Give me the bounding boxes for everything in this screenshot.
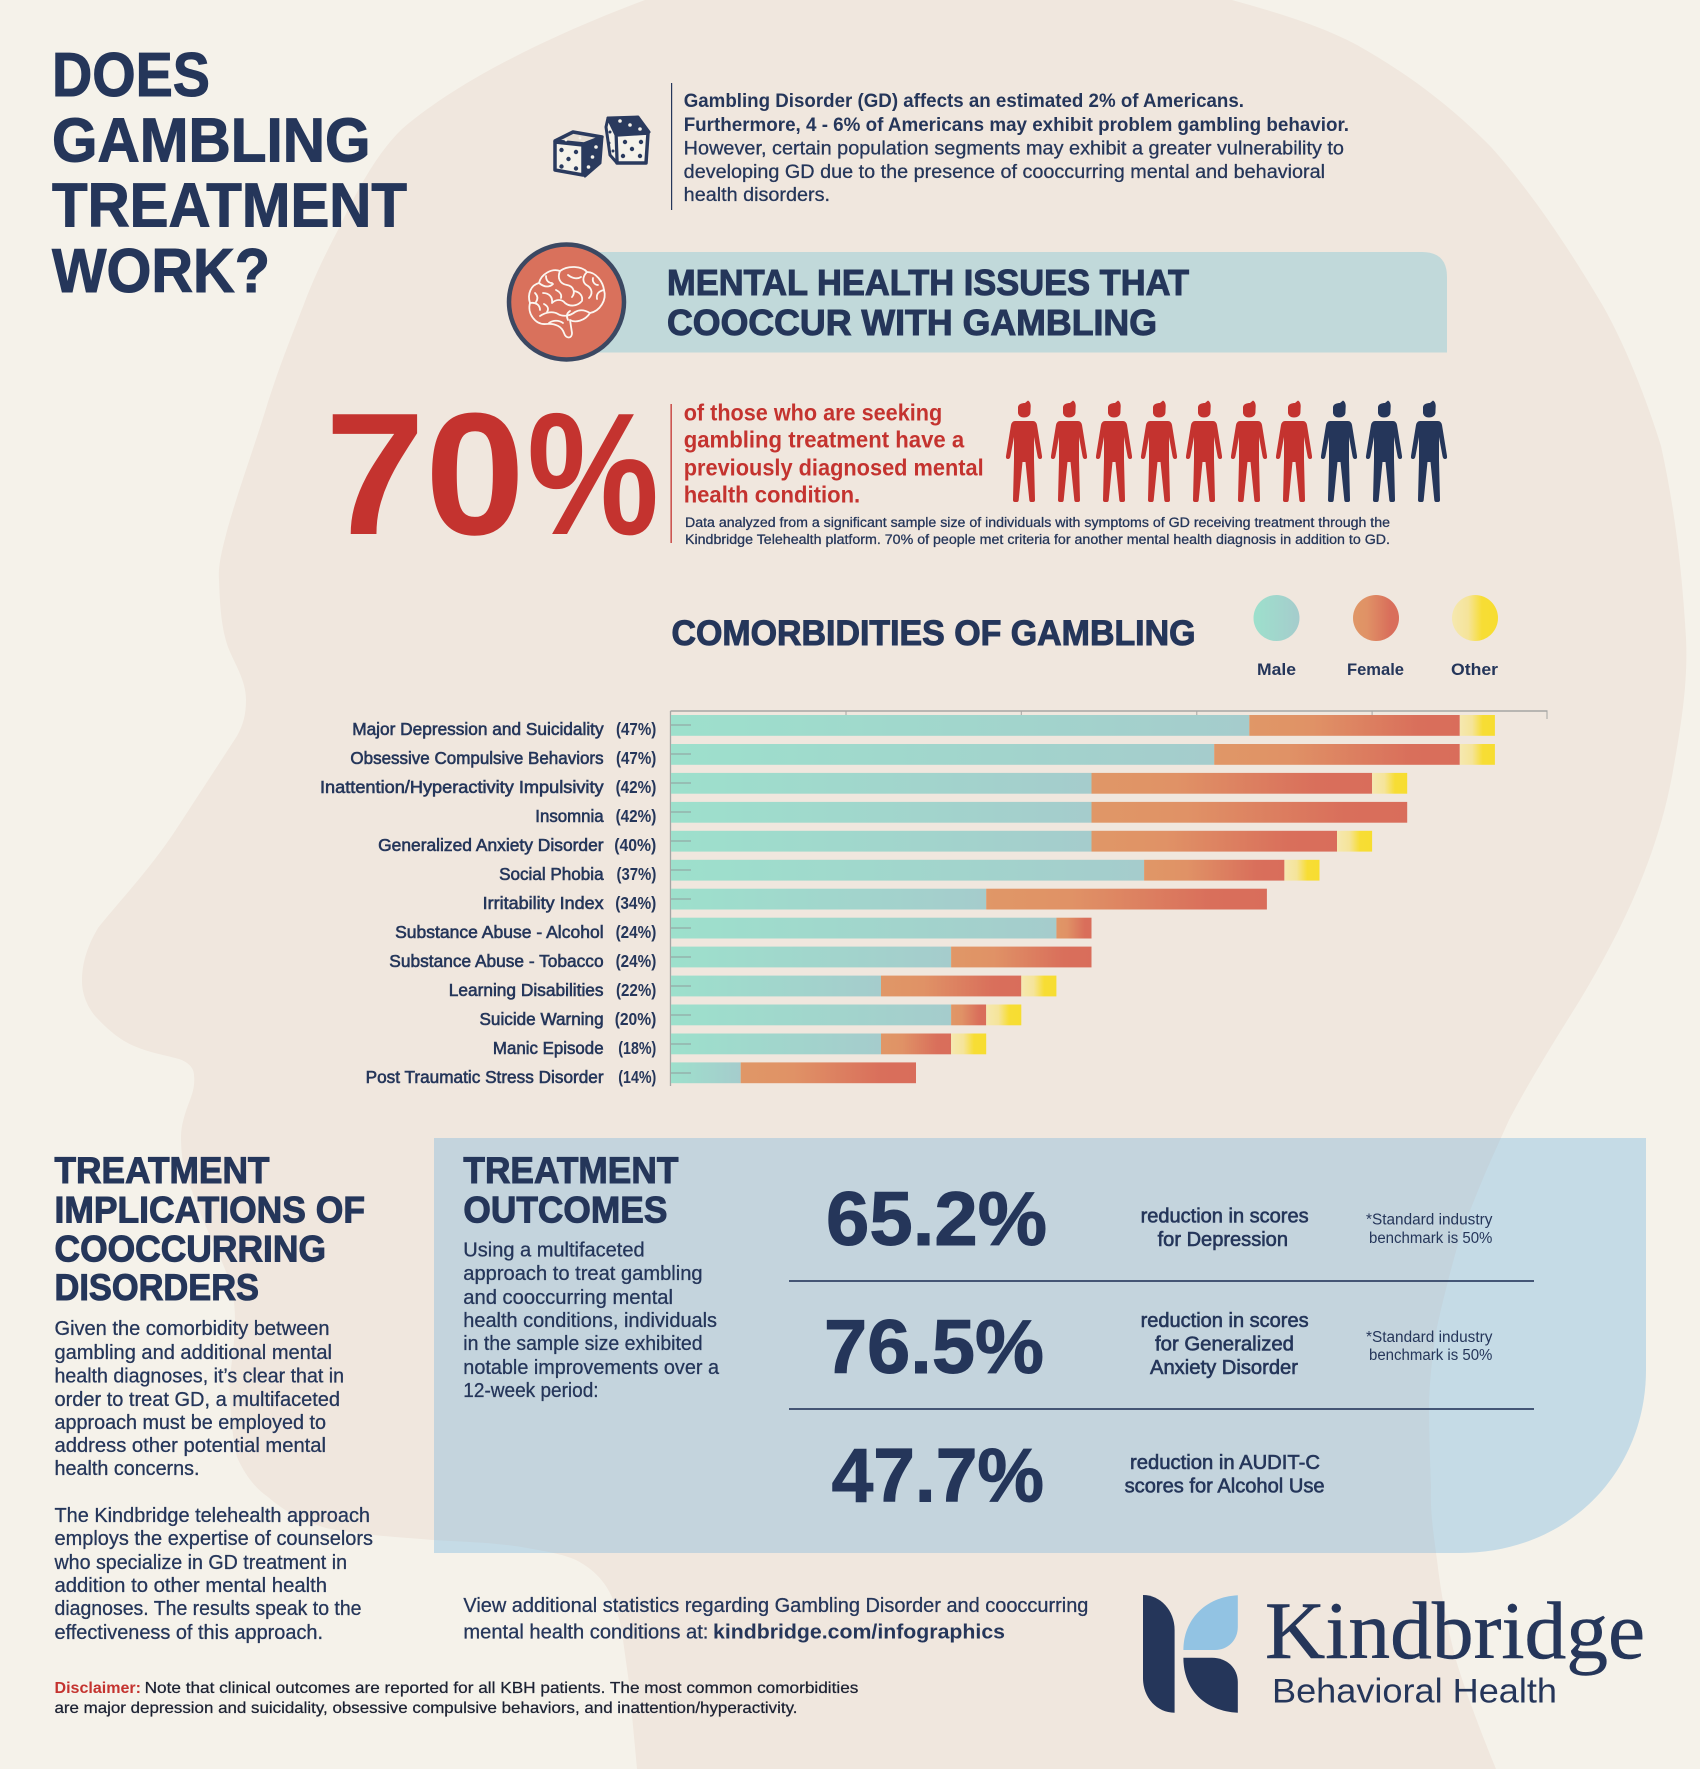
intro text block: Furthermore, 4 - 6% of Americans may exhibit problem gambling behavior.	[684, 114, 1349, 136]
heading: comorbidities: COMORBIDITIES OF GAMBLING	[672, 614, 1196, 653]
intro text block: Gambling Disorder (GD) affects an estimated 2% of Americans.	[684, 90, 1244, 112]
implications body: Given the comorbidity between	[54, 1318, 330, 1340]
stat: alcohol: 47.7%	[832, 1434, 1044, 1519]
row percentages: (47%)	[616, 748, 656, 768]
logo tagline: Behavioral Health	[1272, 1673, 1557, 1711]
intro text block: However, certain population segments may exhibit a greater vulnerability to	[684, 138, 1344, 160]
outcomes body: approach to treat gambling	[463, 1263, 703, 1285]
logo: Kindbridge Behavioral Health	[1143, 1585, 1645, 1713]
row percentages: (14%)	[618, 1067, 656, 1087]
stat: alcohol	[832, 1434, 1325, 1519]
icon: dice	[555, 117, 649, 176]
row percentages: (20%)	[615, 1009, 656, 1029]
outcomes body: 12-week period:	[463, 1380, 599, 1402]
outcomes body: and cooccurring mental	[463, 1287, 673, 1309]
stat: depression: *Standard industry	[1366, 1212, 1493, 1229]
stat: anxiety	[824, 1305, 1493, 1390]
implications heading	[54, 1150, 365, 1308]
row percentages: (18%)	[618, 1038, 656, 1058]
row labels: Generalized Anxiety Disorder	[378, 835, 604, 855]
implications body: effectiveness of this approach.	[54, 1622, 323, 1644]
call to action: kindbridge.com/infographics	[713, 1622, 1005, 1644]
implications heading: IMPLICATIONS OF	[54, 1190, 365, 1230]
disclaimer: Note that clinical outcomes are reported for all KBH patients. The most common comorbidities	[145, 1680, 858, 1697]
outcomes body	[463, 1240, 720, 1402]
row percentages: (22%)	[616, 980, 656, 1000]
outcomes heading: TREATMENT	[463, 1150, 679, 1191]
row labels: Substance Abuse - Tobacco	[389, 951, 604, 971]
red statement: previously diagnosed mental	[684, 455, 984, 481]
row labels: Suicide Warning	[480, 1009, 604, 1029]
people pictogram: 7 of 10	[1006, 400, 1447, 502]
stat: anxiety: reduction in scores	[1141, 1310, 1309, 1332]
banner background	[560, 252, 1447, 352]
divider	[789, 1280, 1534, 1282]
implications body: addition to other mental health	[54, 1575, 327, 1597]
stat: depression	[826, 1177, 1493, 1262]
outcomes body: in the sample size exhibited	[463, 1333, 703, 1355]
row labels	[320, 719, 604, 1087]
implications body: employs the expertise of counselors	[54, 1528, 373, 1550]
call to action: mental health conditions at:	[463, 1622, 708, 1644]
legend: Other	[1451, 660, 1498, 679]
implications body: address other potential mental	[54, 1435, 326, 1457]
implications body: health concerns.	[54, 1458, 200, 1480]
stat: alcohol: scores for Alcohol Use	[1125, 1476, 1325, 1498]
banner heading: MENTAL HEALTH ISSUES THAT	[667, 262, 1189, 303]
row percentages: (24%)	[616, 922, 656, 942]
disclaimer: Disclaimer:	[54, 1680, 141, 1697]
panel: treatment implications	[54, 1150, 373, 1644]
row labels: Manic Episode	[493, 1038, 604, 1058]
footnote: Kindbridge Telehealth platform. 70% of people met criteria for another mental health diagnosis in addition to GD.	[685, 532, 1390, 547]
intro text block	[671, 83, 1349, 210]
row percentages: (47%)	[616, 719, 656, 739]
title: TREATMENT	[52, 172, 407, 240]
implications heading: COOCCURRING	[54, 1228, 326, 1270]
big 70%: %	[527, 376, 659, 571]
logo mark	[1143, 1595, 1238, 1713]
banner heading: COOCCUR WITH GAMBLING	[667, 302, 1157, 343]
stat: alcohol: reduction in AUDIT-C	[1130, 1452, 1320, 1474]
implications body: The Kindbridge telehealth approach	[54, 1505, 370, 1527]
footnote	[685, 515, 1390, 547]
row labels: Obsessive Compulsive Behaviors	[350, 748, 604, 768]
outcomes body: Using a multifaceted	[463, 1240, 645, 1262]
stat: depression: for Depression	[1158, 1229, 1288, 1251]
outcomes body: notable improvements over a	[463, 1357, 720, 1379]
implications body: who specialize in GD treatment in	[54, 1552, 347, 1574]
stat: depression: reduction in scores	[1141, 1206, 1309, 1228]
row labels: Substance Abuse - Alcohol	[395, 922, 604, 942]
panel: 70% statistic	[325, 376, 1447, 571]
icon: brain in circle	[509, 244, 624, 360]
implications body: order to treat GD, a multifaceted	[54, 1389, 340, 1411]
implications heading: DISORDERS	[54, 1267, 259, 1308]
logo wordmark: Kindbridge	[1265, 1585, 1645, 1676]
row percentages	[614, 719, 656, 1087]
big 70%: 70	[325, 376, 525, 571]
outcomes heading	[463, 1150, 679, 1230]
row percentages: (42%)	[616, 777, 656, 797]
row labels: Major Depression and Suicidality	[352, 719, 604, 739]
stat: anxiety: Anxiety Disorder	[1150, 1357, 1298, 1379]
row labels: Inattention/Hyperactivity Impulsivity	[320, 777, 604, 797]
divider	[789, 1408, 1534, 1410]
stat: depression: 65.2%	[826, 1177, 1047, 1262]
row labels: Post Traumatic Stress Disorder	[366, 1067, 604, 1087]
call to action	[463, 1595, 1088, 1644]
red statement: health condition.	[684, 482, 860, 508]
row labels: Social Phobia	[499, 864, 604, 884]
intro text block: health disorders.	[684, 184, 830, 206]
row percentages: (34%)	[615, 893, 656, 913]
implications body: health diagnoses, it’s clear that in	[54, 1366, 344, 1388]
row percentages: (37%)	[616, 864, 656, 884]
stat: anxiety: 76.5%	[824, 1305, 1044, 1390]
red statement: gambling treatment have a	[684, 427, 964, 453]
implications body: approach must be employed to	[54, 1412, 326, 1434]
small row ticks	[671, 725, 691, 1073]
disclaimer	[54, 1680, 858, 1717]
stat: anxiety: for Generalized	[1155, 1334, 1294, 1356]
chart axes	[670, 711, 1548, 1086]
legend: Female	[1347, 660, 1404, 679]
legend	[1254, 595, 1498, 679]
call to action: View additional statistics regarding Gambling Disorder and cooccurring	[463, 1595, 1088, 1617]
panel: mental health banner	[509, 244, 1447, 360]
outcomes body: health conditions, individuals	[463, 1310, 717, 1332]
title: DOES	[52, 41, 210, 110]
row percentages: (40%)	[614, 835, 656, 855]
panel: treatment outcomes	[434, 1138, 1646, 1553]
implications heading: TREATMENT	[54, 1150, 270, 1191]
legend: Male	[1257, 660, 1296, 679]
red statement	[670, 400, 984, 543]
row labels: Learning Disabilities	[449, 980, 604, 1000]
implications body: gambling and additional mental	[54, 1342, 332, 1364]
implications body: diagnoses. The results speak to the	[54, 1598, 362, 1620]
stat: depression: benchmark is 50%	[1369, 1230, 1493, 1247]
outcomes heading: OUTCOMES	[463, 1190, 667, 1230]
row labels: Insomnia	[535, 806, 604, 826]
row labels: Irritability Index	[483, 893, 604, 913]
big 70%	[325, 376, 659, 571]
row percentages: (42%)	[616, 806, 656, 826]
outcomes background	[434, 1138, 1646, 1553]
disclaimer: are major depression and suicidality, obsessive compulsive behaviors, and inattention/hyperactivity.	[54, 1700, 798, 1717]
red statement: of those who are seeking	[684, 400, 942, 426]
footnote: Data analyzed from a significant sample size of individuals with symptoms of GD receiving treatment through the	[685, 515, 1390, 530]
title	[52, 41, 407, 306]
stat: anxiety: *Standard industry	[1366, 1329, 1493, 1346]
bars	[671, 715, 1495, 1083]
title: GAMBLING	[52, 106, 370, 176]
intro text block: developing GD due to the presence of cooccurring mental and behavioral	[684, 161, 1325, 183]
stat: anxiety: benchmark is 50%	[1369, 1347, 1493, 1364]
banner heading	[667, 262, 1189, 343]
title: WORK?	[52, 237, 270, 306]
row percentages: (24%)	[616, 951, 656, 971]
implications body	[54, 1318, 373, 1644]
bar chart	[320, 711, 1548, 1087]
